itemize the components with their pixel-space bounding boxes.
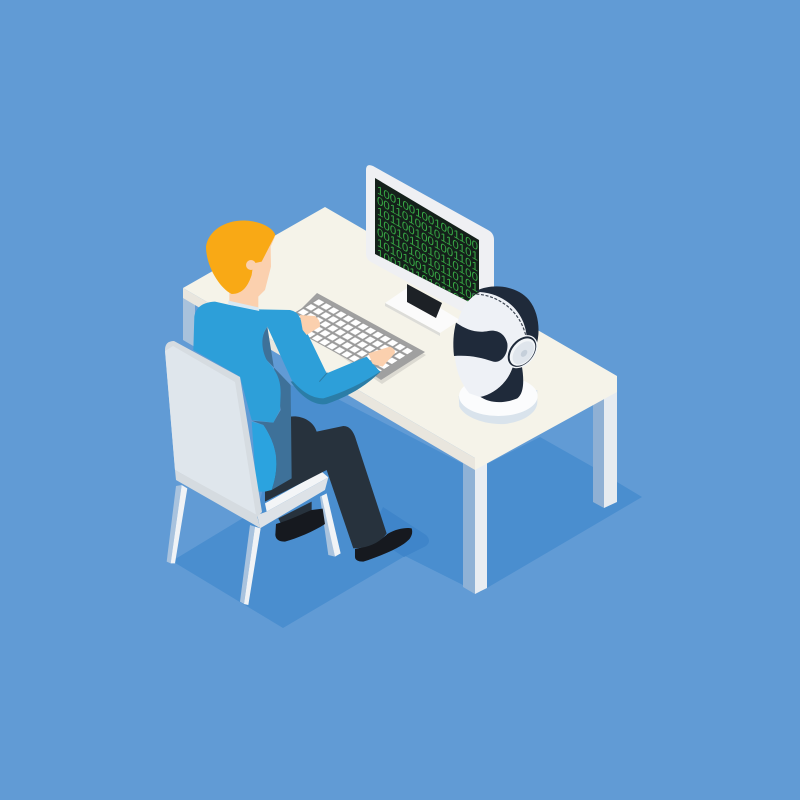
monitor stand base [385, 288, 460, 333]
robot back of head [477, 286, 539, 360]
chair leg front [240, 525, 255, 604]
chair back band [165, 341, 262, 517]
person shadow [370, 507, 429, 557]
near shoe [355, 528, 412, 562]
binary code: 1001011010110100 [377, 214, 478, 285]
binary code: 0011010010110101 [377, 225, 478, 296]
binary code [377, 186, 478, 302]
arm crease [319, 373, 327, 382]
jacket body and arm [193, 302, 380, 423]
lower hand [368, 347, 395, 367]
desk top [183, 207, 617, 470]
keyboard [280, 293, 426, 384]
robot head [453, 286, 544, 424]
far lower leg [278, 502, 312, 528]
binary code: 1001001001001100 [377, 183, 478, 254]
jacket [193, 301, 381, 492]
binary code: 1010100100110100 [377, 235, 478, 306]
chair leg left [167, 485, 182, 563]
arm underside [291, 367, 381, 404]
far shoe [275, 509, 325, 542]
person head [206, 221, 275, 309]
robot neck [480, 365, 523, 402]
fold shadow [252, 327, 292, 490]
keyboard lip [290, 296, 426, 384]
binary code: 1001011010110110 [377, 246, 478, 317]
robot base [459, 390, 537, 424]
chair seat [257, 472, 328, 528]
hands [300, 315, 395, 367]
chair leg right [320, 495, 335, 557]
desk [183, 207, 617, 594]
desk edge [183, 288, 475, 470]
floor shadow [172, 385, 642, 628]
chair back lower band [175, 470, 260, 528]
monitor [366, 165, 494, 336]
monitor screen [375, 178, 479, 307]
robot face [454, 292, 527, 397]
keyboard keys [280, 298, 414, 375]
chair back [165, 341, 262, 528]
illustration: programmer at desk with robot head [165, 165, 642, 628]
monitor bezel [366, 165, 494, 320]
chair legs [167, 485, 341, 605]
lower shirt [252, 422, 276, 492]
binary code: 0011010010110101 [377, 193, 478, 264]
monitor stand neck [407, 284, 442, 318]
hair [206, 221, 275, 294]
robot head seam [472, 294, 526, 335]
chair back face [165, 346, 256, 515]
neck and face [229, 237, 275, 309]
keyboard frame [291, 293, 425, 380]
robot ear [500, 329, 544, 374]
desk rear left leg [183, 296, 195, 347]
desk right leg [593, 385, 617, 508]
desk front leg [463, 460, 487, 594]
robot face band [453, 323, 507, 362]
pants [265, 416, 387, 548]
binary code: 1011001001001101 [377, 204, 478, 275]
person lower body [257, 416, 412, 562]
ear [246, 260, 256, 270]
upper hand [300, 315, 320, 335]
collar [228, 301, 259, 311]
